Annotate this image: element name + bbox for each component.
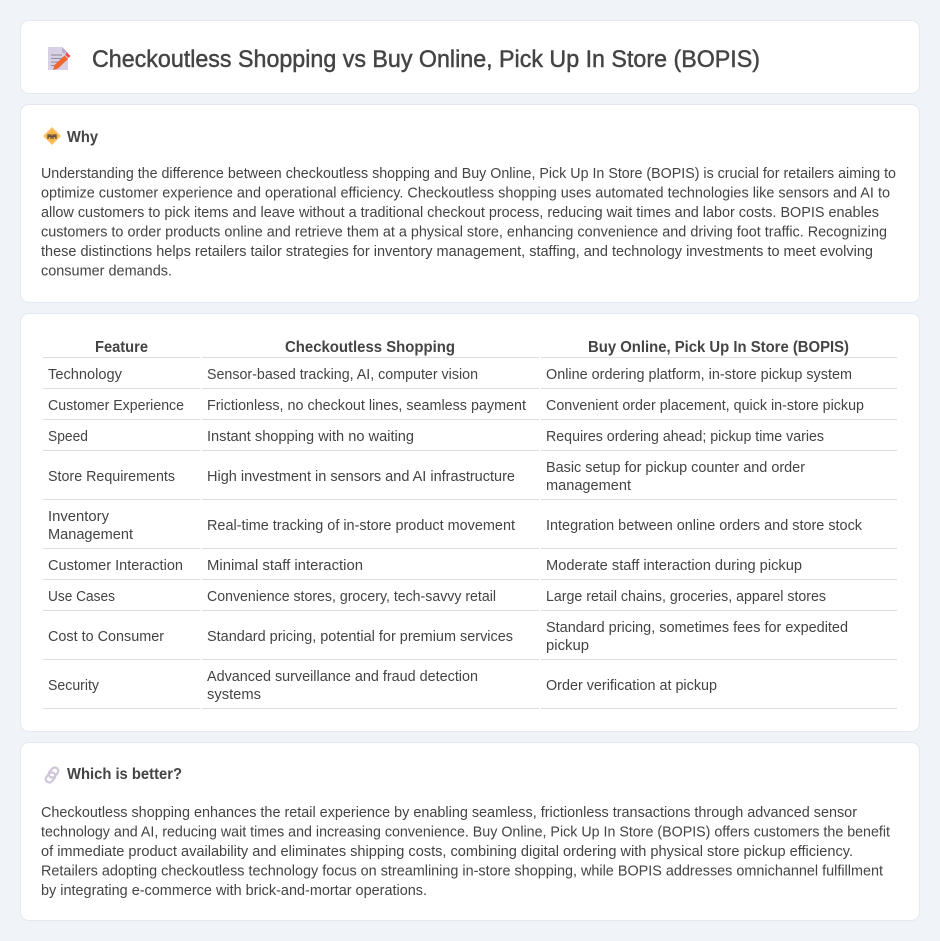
row: security: Advanced surveillance and fraud detection — [207, 669, 478, 685]
row: customer interaction — [48, 558, 802, 574]
row: cost to consumer — [48, 620, 848, 654]
panel: comparison table — [20, 314, 920, 732]
row: inventory management: Management — [48, 527, 133, 543]
row: technology — [48, 367, 852, 383]
icon: memo with pencil — [48, 47, 70, 70]
title text: Checkoutless Shopping vs Buy Online, Pick Up In Store (BOPIS) — [92, 46, 760, 73]
row: customer experience: Convenient order placement, quick in-store pickup — [546, 398, 864, 414]
row: use cases: Use Cases — [48, 589, 115, 605]
row: store requirements: management — [546, 478, 631, 494]
row: customer interaction: Customer Interaction — [48, 558, 183, 574]
row: security: Security — [48, 678, 100, 694]
row: store requirements: High investment in sensors and AI infrastructure — [207, 469, 515, 485]
row: inventory management: Integration between online orders and store stock — [546, 518, 863, 534]
row: customer experience — [48, 398, 864, 414]
row: speed: Requires ordering ahead; pickup time varies — [546, 429, 824, 445]
row: customer experience: Customer Experience — [48, 398, 184, 414]
text block: why paragraph: allow customers to pick items and leave without a traditional checkout process, reducing wait times and labor costs. BOPIS enables — [41, 205, 879, 221]
row: store requirements — [48, 460, 805, 494]
text block: why paragraph — [41, 166, 896, 280]
row: technology: Online ordering platform, in-store pickup system — [546, 367, 852, 383]
row: speed: Speed — [48, 429, 88, 445]
table rules — [43, 358, 897, 708]
row: customer interaction: Moderate staff interaction during pickup — [546, 558, 802, 574]
text block: why paragraph: optimize customer experience and operational efficiency. Checkoutless shopping uses automated technologies like sensors and AI to — [41, 186, 890, 202]
panel: why — [20, 104, 920, 302]
table header: Buy Online, Pick Up In Store (BOPIS) — [588, 339, 849, 356]
heading: which is better: Which is better? — [67, 766, 182, 783]
row: speed — [48, 429, 824, 445]
panel: title — [20, 20, 920, 94]
row: cost to consumer: pickup — [546, 638, 589, 654]
text block: which is better paragraph: Retailers adopting checkoutless technology focus on streamlining in-store shopping, while BOPIS addresses omnichannel fulfillment — [41, 864, 883, 880]
row: store requirements: Basic setup for pickup counter and order — [546, 460, 805, 476]
row: inventory management: Inventory — [48, 509, 110, 525]
text block: why paragraph: consumer demands. — [41, 264, 172, 280]
row: cost to consumer: Standard pricing, potential for premium services — [207, 629, 513, 645]
row: inventory management: Real-time tracking of in-store product movement — [207, 518, 515, 534]
row: store requirements: Store Requirements — [48, 469, 175, 485]
table header: Feature — [95, 339, 148, 356]
row: security: Order verification at pickup — [546, 678, 717, 694]
row: cost to consumer: Cost to Consumer — [48, 629, 164, 645]
text block: which is better paragraph — [41, 805, 890, 899]
table header — [95, 339, 849, 356]
table header: Checkoutless Shopping — [285, 339, 455, 356]
panel: which is better — [20, 742, 920, 920]
row: technology: Sensor-based tracking, AI, computer vision — [207, 367, 478, 383]
text block: why paragraph: these distinctions helps retailers tailor strategies for inventory management, staffing, and technology investments to meet evolving — [41, 244, 873, 260]
icon: link — [44, 766, 60, 784]
row: speed: Instant shopping with no waiting — [207, 429, 414, 445]
row: technology: Technology — [48, 367, 123, 383]
heading: why: Why — [67, 129, 98, 146]
text block: which is better paragraph: of immediate product availability and eliminates shipping costs, combining digital ordering with physical store pickup efficiency. — [41, 844, 853, 860]
row: inventory management — [48, 509, 863, 543]
text block: which is better paragraph: Checkoutless shopping enhances the retail experience by enabling seamless, frictionless transactions through advanced sensor — [41, 805, 857, 821]
text block: why paragraph: Understanding the difference between checkoutless shopping and Buy Online, Pick Up In Store (BOPIS) is crucial for retailers aiming to — [41, 166, 896, 182]
row: use cases — [48, 589, 826, 605]
text block: which is better paragraph: by integrating e-commerce with brick-and-mortar operations. — [41, 883, 427, 899]
row: use cases: Large retail chains, groceries, apparel stores — [546, 589, 826, 605]
row: cost to consumer: Standard pricing, sometimes fees for expedited — [546, 620, 848, 636]
row: security: systems — [207, 687, 261, 703]
icon: construction diamond — [44, 128, 60, 144]
row: security — [48, 669, 717, 703]
text block: which is better paragraph: technology and AI, reducing wait times and increasing convenience. Buy Online, Pick Up In Store (BOPIS) offers customers the benefit — [41, 824, 890, 840]
row: use cases: Convenience stores, grocery, tech-savvy retail — [207, 589, 496, 605]
row: customer interaction: Minimal staff interaction — [207, 558, 363, 574]
text block: why paragraph: customers to order products online and retrieve them at a physical store, enhancing convenience and driving foot traffic. Recognizing — [41, 224, 887, 240]
row: customer experience: Frictionless, no checkout lines, seamless payment — [207, 398, 526, 414]
